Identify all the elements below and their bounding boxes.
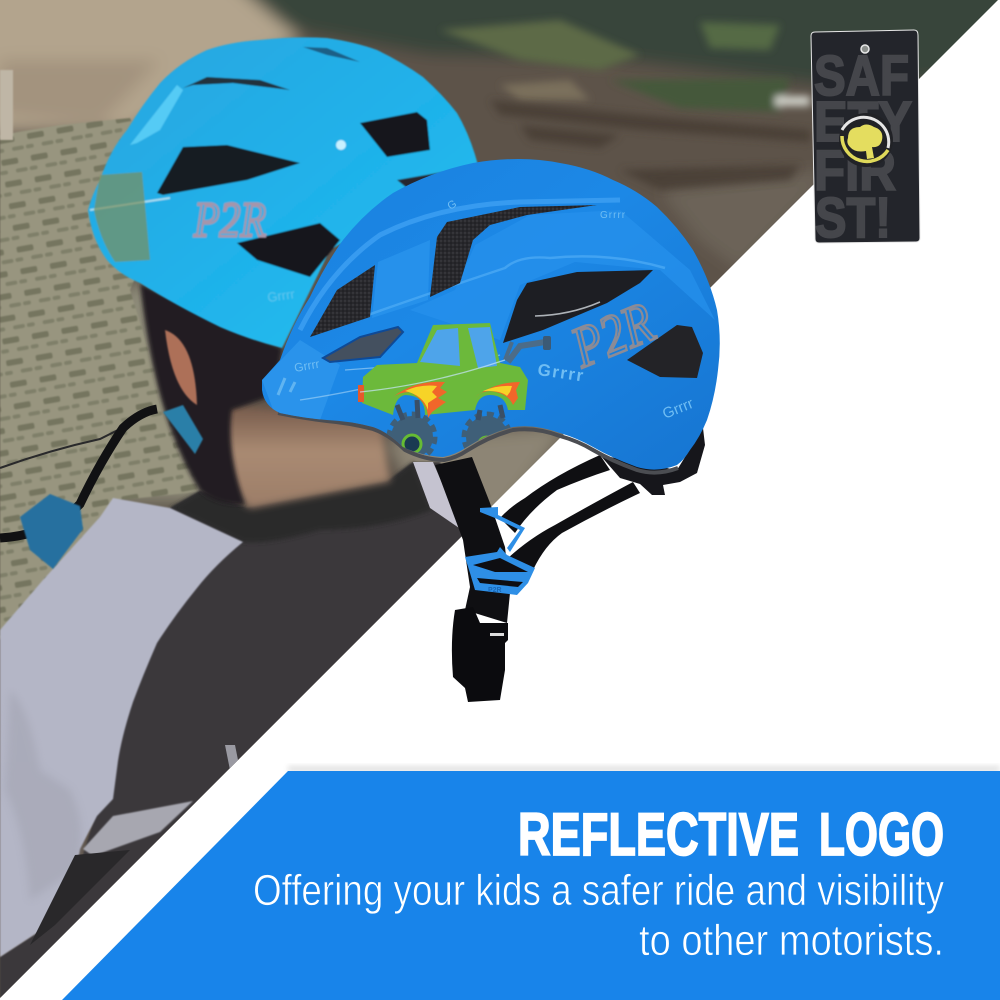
truck wheel: front [464, 414, 510, 460]
gloss streak [300, 355, 500, 400]
banner shape [62, 771, 1000, 1000]
vent: lower [237, 223, 340, 277]
truck tail light [358, 385, 364, 402]
child neck [225, 405, 390, 508]
front panel [372, 240, 430, 318]
tag card [811, 30, 920, 243]
label: Grrrr rear: Grrrr [660, 395, 696, 423]
tag lettering: ETY [814, 90, 912, 154]
vent: upper left [157, 145, 300, 195]
banner shadow [288, 766, 1000, 772]
logo on kid helmet: P2R [193, 191, 266, 247]
label: Grrrr top: Grrrr [600, 210, 626, 221]
rib highlight [365, 256, 665, 316]
print mark [225, 745, 238, 768]
vent: top rear [183, 77, 290, 90]
grip control [20, 494, 83, 569]
heading: REFLECTIVE [518, 801, 799, 868]
brand logo P2R: P2R [562, 289, 663, 380]
front ribs [278, 378, 295, 395]
vent: top [430, 205, 597, 297]
reflective text: Grrrr [266, 286, 296, 305]
truck axles [397, 400, 503, 420]
tag hole [861, 45, 869, 53]
cuff patch [83, 801, 193, 856]
flame: rear [393, 382, 447, 418]
flame: front [475, 382, 520, 405]
chin strap [163, 405, 203, 454]
top band highlight [300, 200, 620, 330]
rear harness [600, 428, 705, 495]
truck window: front [468, 327, 497, 368]
child's blue helmet [88, 37, 478, 348]
vent: top [303, 47, 360, 62]
hang tag: safety first [811, 30, 920, 250]
vent: side [503, 270, 653, 343]
jersey light sleeve [0, 498, 243, 957]
label: Grrrr front: Grrrr [293, 357, 320, 375]
description line 2: to other motorists. [639, 916, 944, 965]
label: small glyph: G [446, 198, 459, 213]
buckle [452, 607, 508, 702]
helmet foam liner edge [278, 413, 678, 473]
blue strap slider [465, 507, 535, 595]
side strap lower [508, 482, 640, 570]
tag lettering: FIR [814, 139, 896, 203]
front strap [435, 457, 510, 623]
tag lettering [814, 44, 912, 250]
panel: blue caption banner [62, 771, 1000, 1000]
truck wheel: rear [389, 414, 435, 460]
side strap upper [500, 455, 610, 533]
vent: far [397, 172, 443, 188]
road streaks [490, 100, 810, 190]
lower hem dark [30, 850, 130, 945]
cobblestone pavement [0, 118, 215, 640]
truck on kid helmet [94, 172, 150, 262]
helmet shell [255, 150, 725, 480]
side highlight panel [485, 221, 714, 340]
truck window: rear [420, 328, 460, 366]
vent: rear [627, 325, 703, 378]
shoulder panel [413, 462, 458, 528]
child hair and shadow [140, 283, 282, 505]
slider brand mark: P2R [488, 587, 502, 594]
heading: LOGO [819, 801, 944, 868]
front brim highlight [262, 340, 340, 420]
label: Grrrr: Grrrr [536, 360, 586, 386]
gloss over truck [360, 360, 505, 392]
grass patches [440, 20, 810, 112]
post at left edge [0, 70, 13, 140]
collar [170, 462, 432, 542]
child ear [165, 330, 197, 405]
vent: front [310, 265, 375, 337]
reflector strip [323, 327, 403, 362]
gloss panel [130, 85, 183, 145]
sleeve fold shading [5, 690, 81, 900]
tag lettering: SAF [814, 44, 909, 108]
handlebar [0, 409, 157, 569]
vent: upper right [360, 112, 430, 157]
safety badge: ring and brain [839, 113, 893, 167]
product helmet with straps [255, 150, 725, 702]
tag lettering: ST! [815, 186, 891, 250]
truck body [362, 323, 528, 415]
glare [336, 140, 346, 150]
truck exhaust [508, 342, 545, 362]
child jersey [0, 462, 470, 998]
